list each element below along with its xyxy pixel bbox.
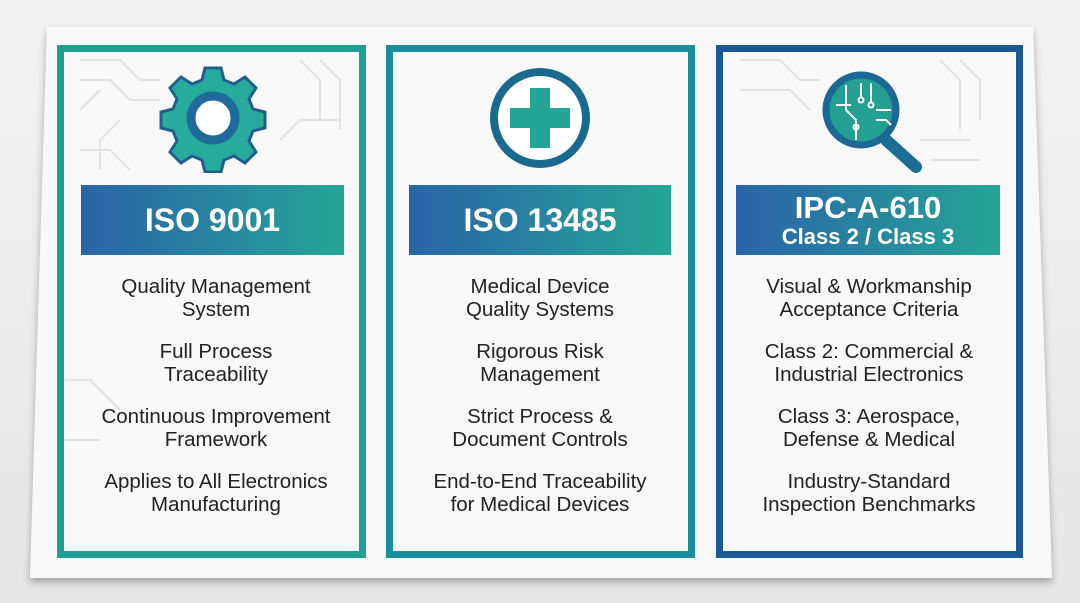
- text: ISO 9001 points: [101, 275, 331, 516]
- text: IPC-A-610 points: Inspection Benchmarks: [762, 493, 976, 516]
- text: ISO 13485 points: [433, 275, 647, 516]
- text: IPC-A-610 points: Industrial Electronics: [774, 363, 964, 386]
- text: IPC-A-610 points: Class 2: Commercial &: [765, 340, 973, 363]
- text: ISO 9001 points: Continuous Improvement: [101, 405, 331, 428]
- icon: gear: [160, 66, 266, 173]
- icon: magnifier circuit: [822, 72, 922, 173]
- text: ISO 9001 points: Applies to All Electronics: [104, 470, 328, 493]
- text: IPC-A-610 points: Class 3: Aerospace,: [778, 405, 960, 428]
- text: ISO 9001 points: Full Process: [160, 340, 272, 363]
- icon: medical plus: [490, 68, 590, 168]
- text: IPC-A-610 points: [762, 275, 976, 516]
- text: ISO 13485 points: Strict Process &: [467, 405, 613, 428]
- banner: IPC-A-610: [736, 185, 1000, 255]
- text: IPC-A-610 points: Acceptance Criteria: [780, 298, 958, 321]
- text: ISO 13485 points: Management: [480, 363, 600, 386]
- text: ISO 13485 points: Rigorous Risk: [476, 340, 604, 363]
- text: ISO 13485 points: End-to-End Traceability: [433, 470, 647, 493]
- text: ISO 9001 points: Traceability: [164, 363, 268, 386]
- panel: ISO 9001 border: [57, 45, 366, 558]
- banner: ISO 9001: [81, 185, 344, 255]
- text: ISO 9001 points: System: [182, 298, 250, 321]
- banner: ISO 13485: [409, 185, 671, 255]
- banner: ISO 9001: ISO 9001: [145, 202, 280, 238]
- banner: ISO 13485: ISO 13485: [464, 202, 616, 238]
- text: IPC-A-610 points: Industry-Standard: [788, 470, 950, 493]
- text: IPC-A-610 points: Defense & Medical: [783, 428, 955, 451]
- text: ISO 13485 points: for Medical Devices: [451, 493, 629, 516]
- text: ISO 13485 points: Document Controls: [452, 428, 628, 451]
- banner: IPC-A-610: IPC-A-610: [795, 190, 941, 224]
- panel: IPC-A-610 border: [716, 45, 1023, 558]
- text: ISO 9001 points: Manufacturing: [151, 493, 281, 516]
- text: ISO 13485 points: Medical Device: [470, 275, 610, 298]
- text: ISO 9001 points: Quality Management: [121, 275, 311, 298]
- panel: ISO 13485 border: [386, 45, 695, 558]
- text: IPC-A-610 points: Visual & Workmanship: [766, 275, 972, 298]
- text: ISO 13485 points: Quality Systems: [466, 298, 614, 321]
- banner: IPC-A-610: Class 2 / Class 3: [782, 224, 954, 248]
- text: ISO 9001 points: Framework: [165, 428, 267, 451]
